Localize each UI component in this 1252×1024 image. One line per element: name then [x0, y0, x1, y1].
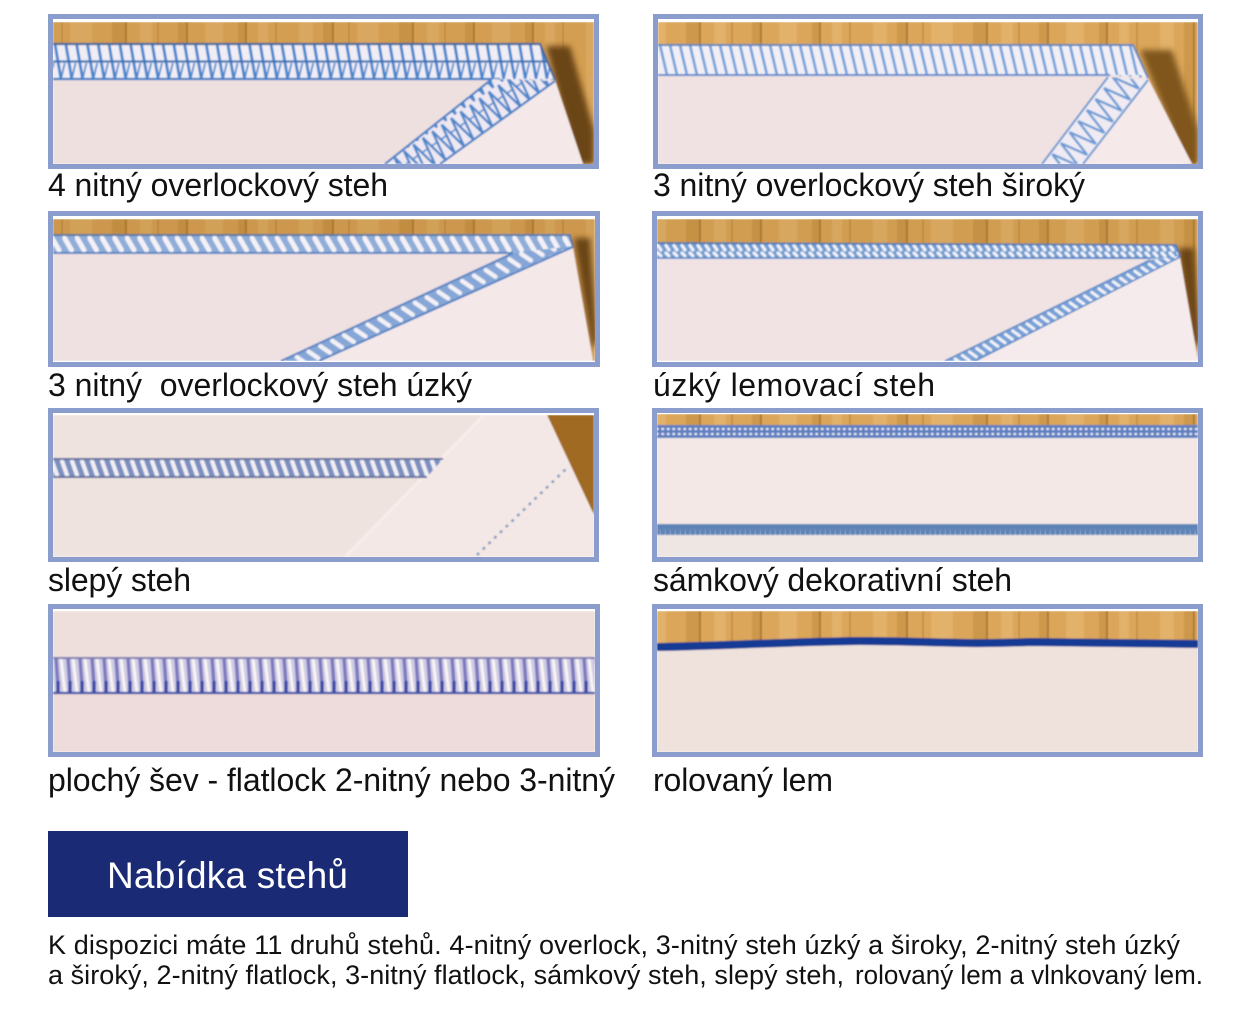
- photo: rolled hem: [657, 611, 1198, 752]
- photo: blind stitch: [53, 415, 594, 557]
- photo: decorative pin-tuck stitch: [657, 414, 1198, 557]
- panel: plochý šev - flatlock: [50, 606, 598, 754]
- photo: 4-thread overlock stitch: [53, 22, 594, 164]
- caption: úzký lemovací steh: úzký lemovací steh: [653, 367, 935, 403]
- description paragraph: K dispozici máte 11 druhů stehů. 4-nitný overlock, 3-nitný steh úzký a široky, 2-nitný steh úzký: [48, 930, 1180, 960]
- panel: 4 nitný overlockový steh: [50, 16, 596, 166]
- description paragraph: [48, 930, 1203, 990]
- caption: sámkový dekorativní steh: sámkový dekorativní steh: [653, 562, 1012, 598]
- dotted hem line: [477, 468, 567, 555]
- description paragraph: rolovaný lem a vlnkovaný lem.: [855, 960, 1203, 990]
- panel: 3 nitný overlockový steh úzký: [50, 214, 598, 364]
- photo: flatlock seam: [53, 611, 595, 752]
- panel: slepý steh: [50, 410, 596, 560]
- caption: 3 nitný overlockový steh široký: 3 nitný overlockový steh široký: [653, 167, 1085, 203]
- heading banner: Nabídka stehů: [48, 831, 408, 917]
- description paragraph: a široký, 2-nitný flatlock, 3-nitný flatlock, sámkový steh, slepý steh,: [48, 960, 844, 990]
- caption: 3 nitný overlockový steh úzký: 3 nitný overlockový steh úzký: [48, 367, 472, 403]
- caption: plochý šev - flatlock 2-nitný nebo 3-nitný: plochý šev - flatlock 2-nitný nebo 3-nitný: [48, 762, 615, 798]
- caption: slepý steh: slepý steh: [48, 562, 191, 598]
- panel: sámkový dekorativní steh: [654, 410, 1200, 560]
- photo: narrow hemming stitch: [657, 219, 1200, 361]
- panel: rolovaný lem: [654, 606, 1200, 754]
- caption: 4 nitný overlockový steh: 4 nitný overlockový steh: [48, 167, 388, 203]
- caption: rolovaný lem: rolovaný lem: [653, 762, 833, 798]
- panel: 3 nitný overlockový steh široký: [656, 16, 1200, 166]
- photo: wide 3-thread overlock stitch: [658, 22, 1198, 164]
- heading banner: Nabídka stehů: Nabídka stehů: [107, 855, 348, 896]
- panel: úzký lemovací steh: [654, 214, 1200, 364]
- photo: narrow 3-thread overlock stitch: [53, 219, 597, 361]
